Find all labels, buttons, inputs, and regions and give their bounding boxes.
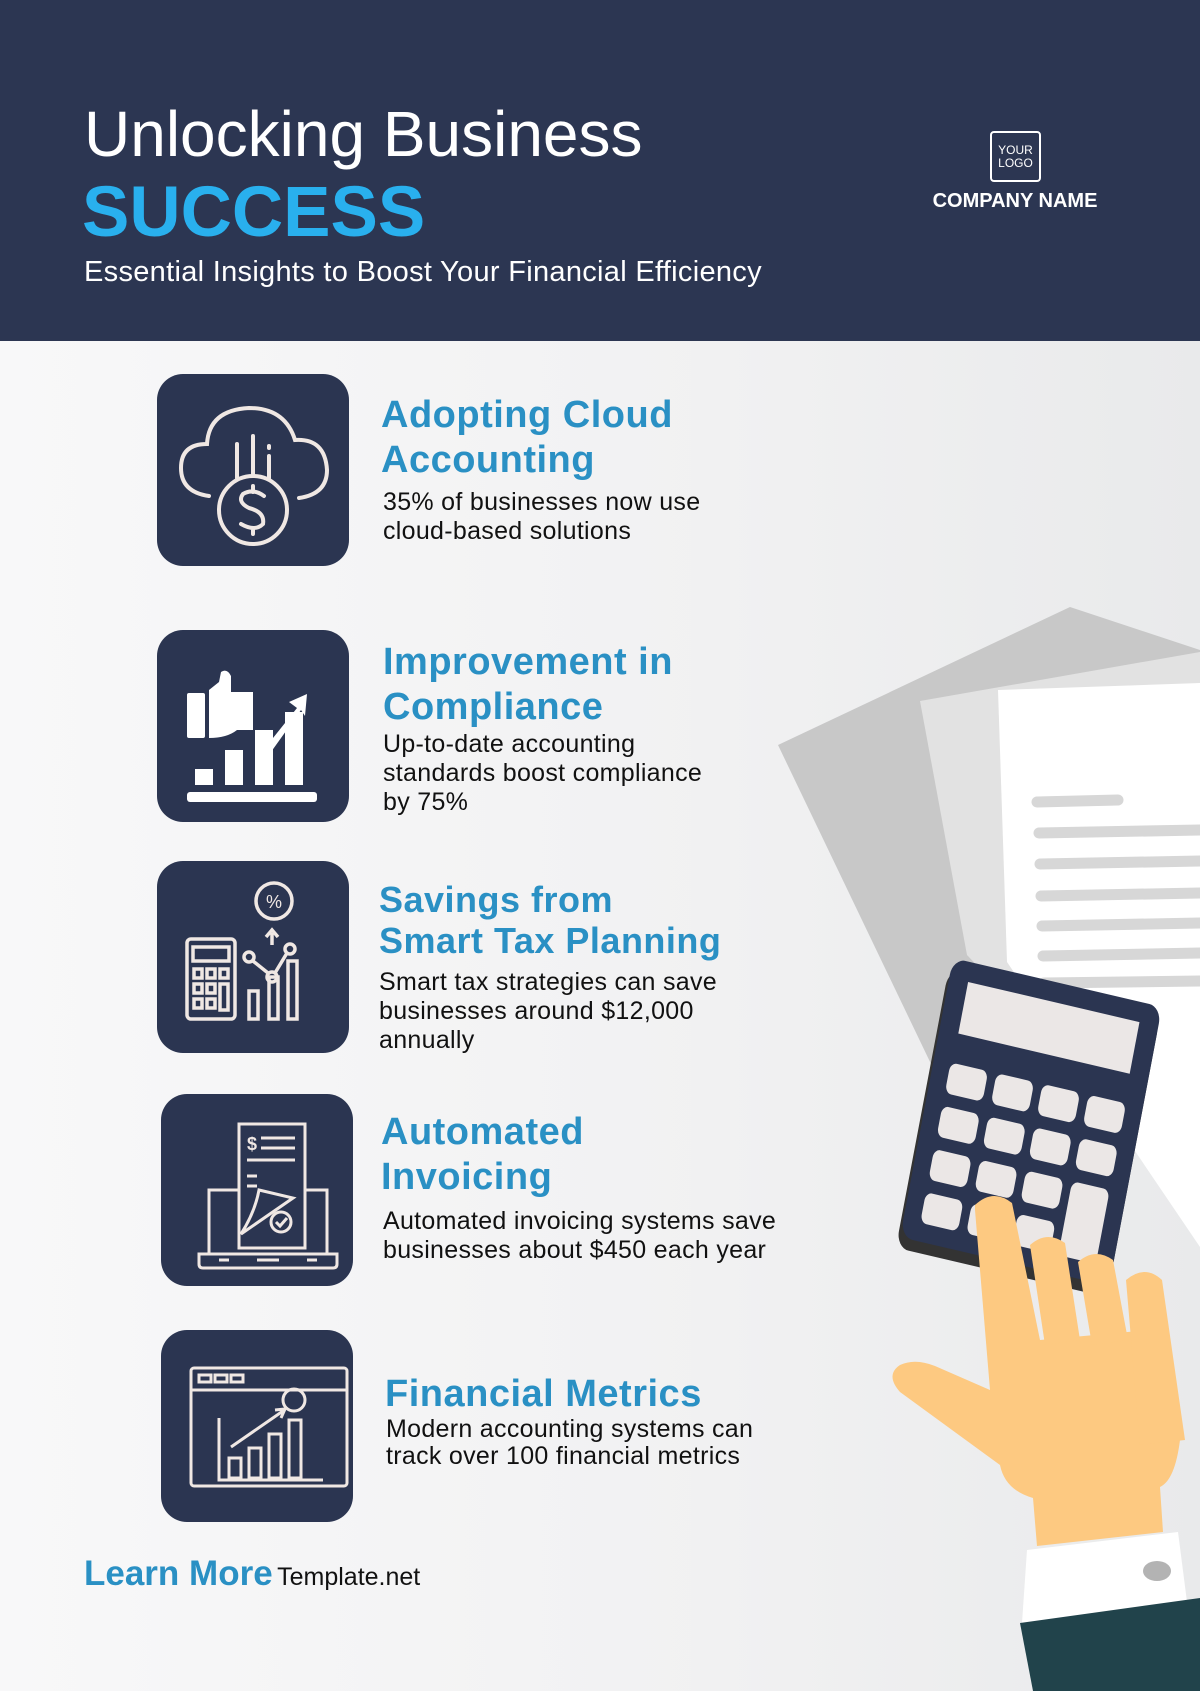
heading: Accounting xyxy=(381,439,595,481)
heading xyxy=(383,641,673,728)
body text: businesses about $450 each year xyxy=(383,1236,766,1264)
panel: tax planning xyxy=(157,861,721,1054)
title line 1: Unlocking Business xyxy=(84,98,642,170)
heading xyxy=(381,1111,584,1198)
icon: cloud with dollar xyxy=(157,374,349,566)
body text xyxy=(383,730,702,816)
panel: financial metrics xyxy=(161,1330,753,1522)
icon: browser chart xyxy=(161,1330,353,1522)
footer: learn more: Learn More Template.net xyxy=(84,1554,420,1593)
heading: Improvement in xyxy=(383,641,673,683)
body text: standards boost compliance xyxy=(383,759,702,787)
icon: laptop invoice xyxy=(161,1094,353,1286)
body text: Automated invoicing systems save xyxy=(383,1207,776,1235)
logo box xyxy=(990,131,1041,182)
icon: thumbs up and bars xyxy=(157,630,349,822)
heading: Savings from xyxy=(379,879,613,920)
icon: calculator with chart: % xyxy=(266,892,282,912)
logo box: YOUR xyxy=(998,143,1033,157)
icon: calculator with chart xyxy=(157,861,349,1053)
title line 2: SUCCESS xyxy=(82,173,425,252)
body text xyxy=(386,1415,753,1470)
body text: by 75% xyxy=(383,788,468,816)
heading: Automated xyxy=(381,1111,584,1153)
body text xyxy=(383,488,700,545)
header band xyxy=(0,0,1200,341)
body text xyxy=(379,968,717,1054)
body text: 35% of businesses now use xyxy=(383,488,700,516)
body text: cloud-based solutions xyxy=(383,517,631,545)
panel: compliance xyxy=(157,630,702,822)
logo box: LOGO xyxy=(998,156,1033,170)
body text: Up-to-date accounting xyxy=(383,730,635,758)
body text: businesses around $12,000 xyxy=(379,997,694,1025)
calculator xyxy=(896,958,1162,1297)
heading: Compliance xyxy=(383,686,603,728)
body text: annually xyxy=(379,1026,475,1054)
heading: Financial Metrics xyxy=(385,1373,702,1415)
heading xyxy=(379,879,721,961)
heading xyxy=(381,394,673,481)
subtitle: Essential Insights to Boost Your Financial Efficiency xyxy=(84,256,762,288)
body text: Modern accounting systems can xyxy=(386,1415,753,1443)
body text: Smart tax strategies can save xyxy=(379,968,717,996)
panel: automated invoicing xyxy=(161,1094,776,1286)
heading: Adopting Cloud xyxy=(381,394,673,436)
icon: laptop invoice: $ xyxy=(247,1134,257,1154)
company name: COMPANY NAME xyxy=(933,190,1097,212)
body text xyxy=(383,1207,776,1264)
heading: Smart Tax Planning xyxy=(379,920,721,961)
panel: cloud accounting xyxy=(157,374,700,566)
heading: Invoicing xyxy=(381,1156,552,1198)
hand xyxy=(892,1196,1185,1546)
body text: track over 100 financial metrics xyxy=(386,1442,740,1470)
